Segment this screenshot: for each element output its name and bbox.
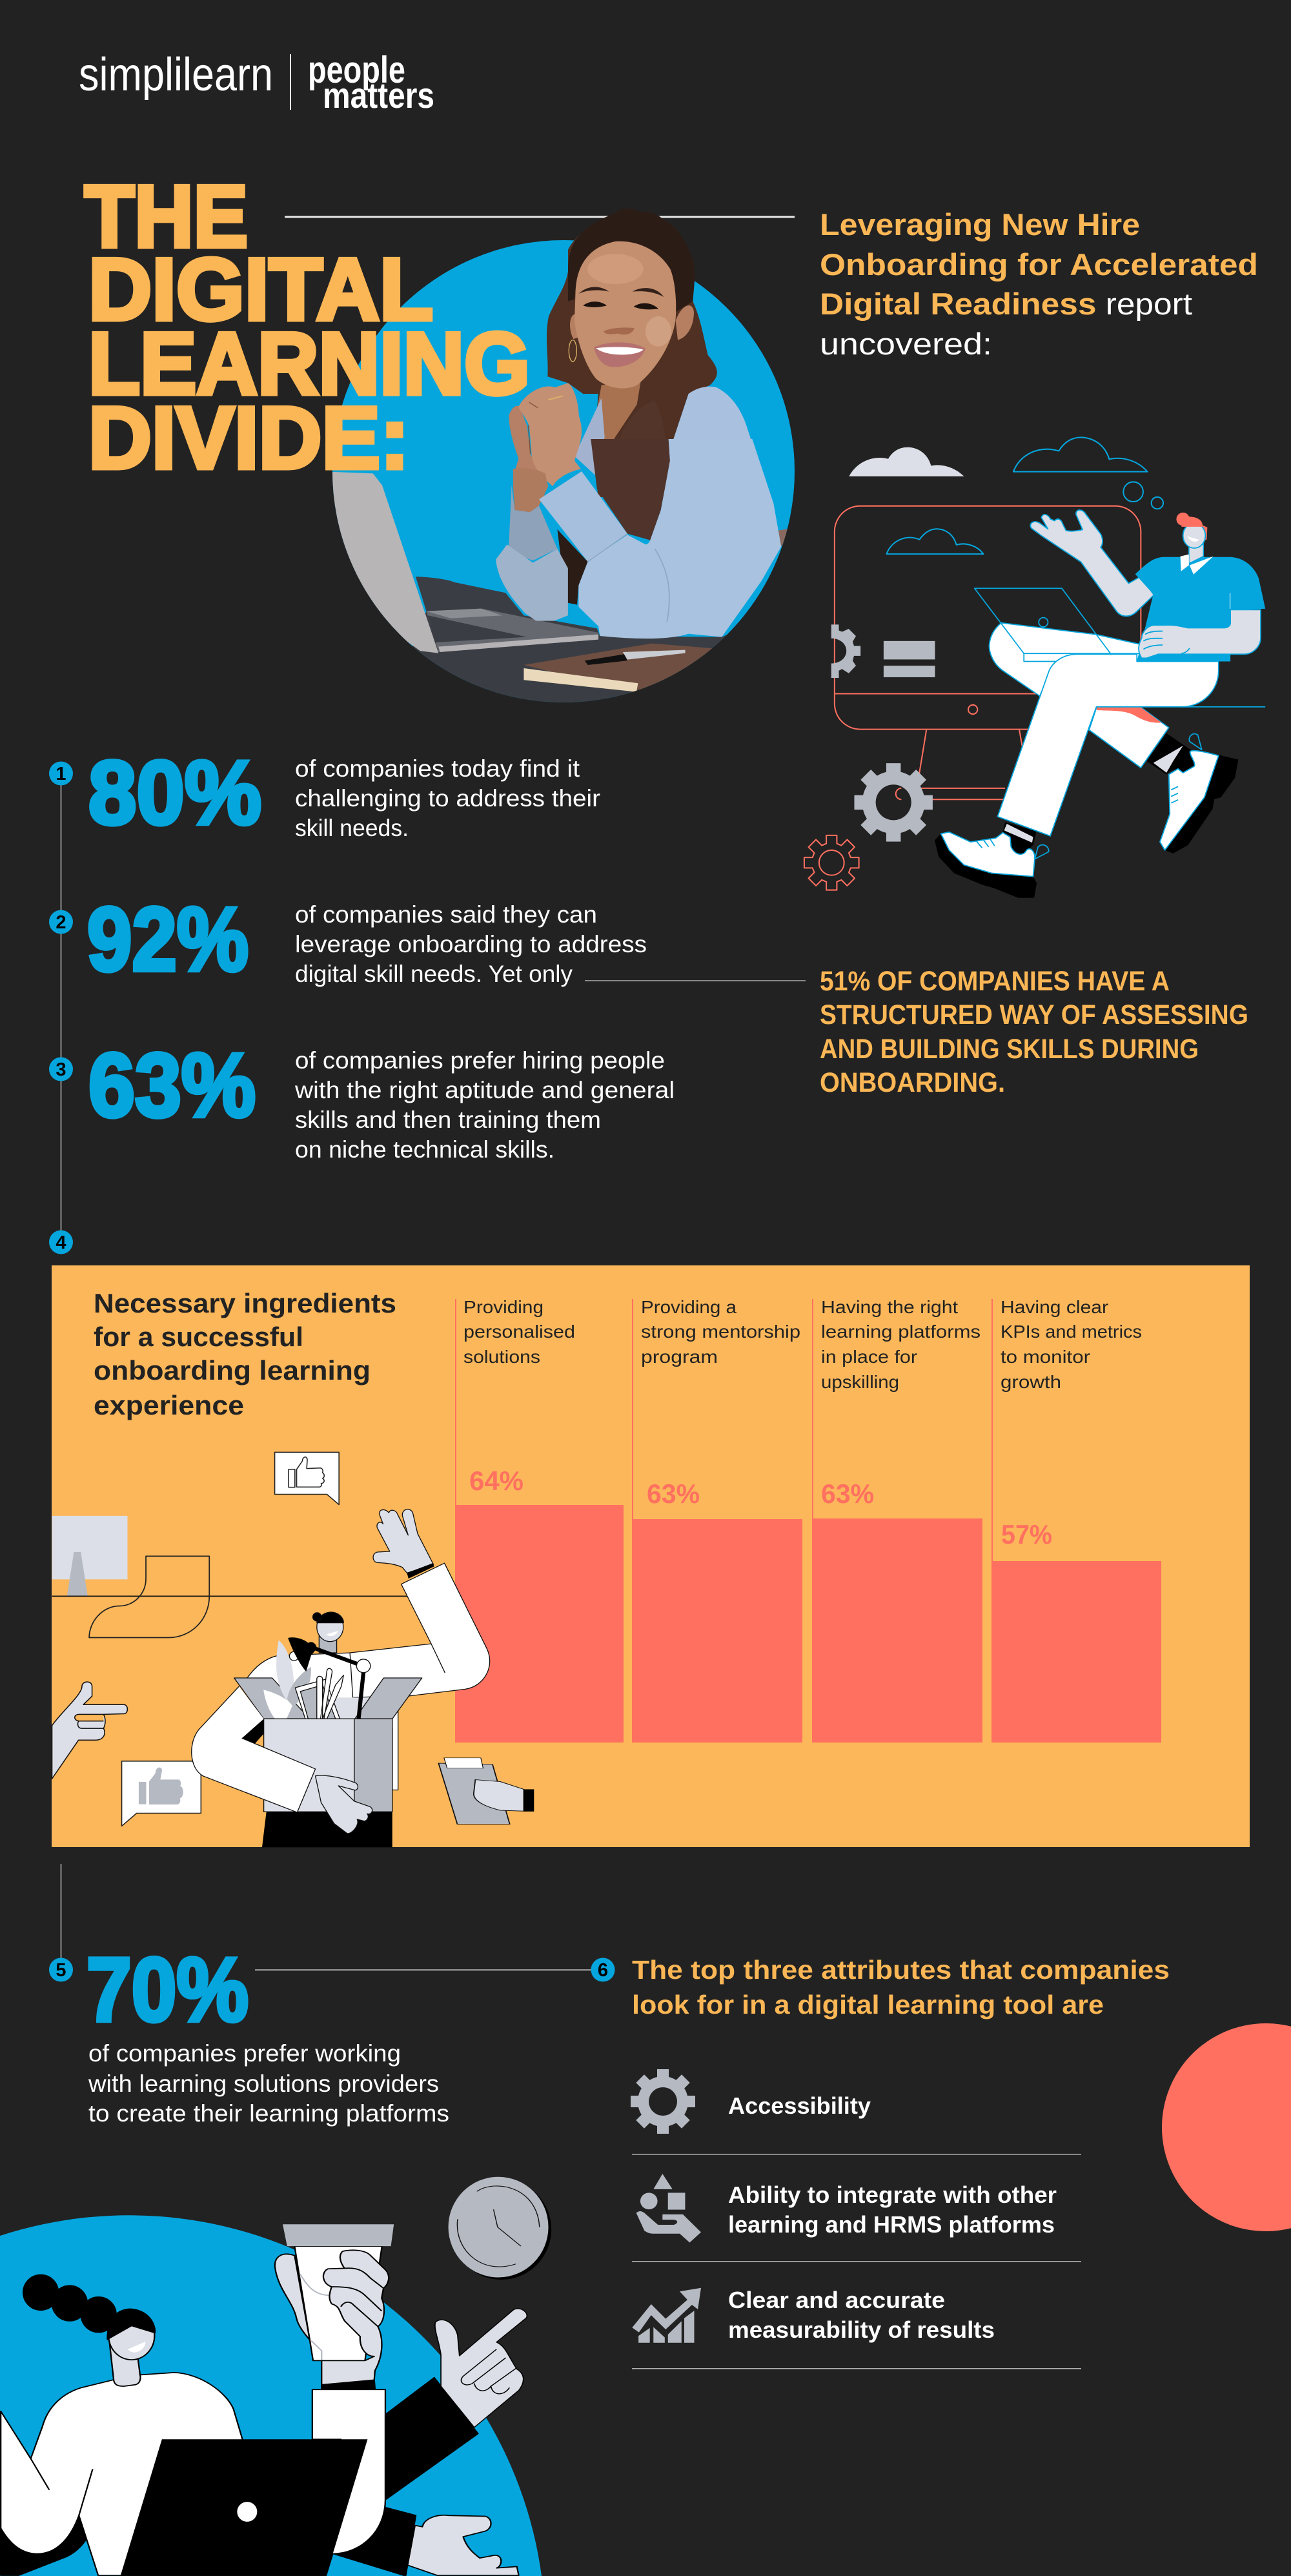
woman blouse and sleeves	[496, 439, 781, 639]
icon: clock	[449, 2177, 551, 2280]
bar: learning platforms: 63%	[821, 1478, 874, 1509]
raised hand	[373, 1509, 434, 1579]
heading: for a successful	[94, 1322, 303, 1352]
pointing hand	[434, 2309, 527, 2428]
connector line between 5 and 6	[255, 1969, 592, 1970]
illustration: man with laptop sitting in front of monitor	[804, 437, 1265, 898]
sleeve and lower hand	[192, 1686, 372, 1834]
body	[234, 1563, 490, 1790]
stat: 92%: leverage onboarding to address	[295, 931, 647, 957]
bar: KPIs and metrics: 57%	[1001, 1519, 1052, 1549]
bar: mentorship program: strong mentorship	[641, 1322, 800, 1342]
icon: half gear	[831, 624, 860, 678]
stat: 70%: to create their learning platforms	[88, 2100, 449, 2127]
stat: 92%: 92%	[87, 888, 249, 990]
stat: 63%: skills and then training them	[295, 1107, 601, 1133]
bar: KPIs and metrics: KPIs and metrics	[1001, 1322, 1142, 1342]
bar: KPIs and metrics: growth	[1001, 1372, 1061, 1392]
stat: 80%: of companies today find it	[295, 755, 580, 782]
attribute: measurability	[632, 2287, 995, 2343]
title: LEARNING	[88, 314, 530, 413]
bar chart	[455, 1297, 1161, 1743]
step 2 badge	[49, 910, 73, 934]
attribute: accessibility: Accessibility	[728, 2092, 871, 2119]
timeline	[49, 762, 73, 1254]
head	[1176, 513, 1207, 548]
step 2 badge: 2	[56, 912, 66, 933]
box	[242, 1678, 422, 1812]
report intro text: Onboarding for Accelerated	[820, 247, 1258, 281]
raised arm with cup	[275, 2224, 478, 2575]
title: DIGITAL	[88, 240, 433, 338]
bar: learning platforms: in place for	[821, 1347, 917, 1367]
step 6 badge	[591, 1958, 615, 1982]
icon: pointing hand	[52, 1682, 127, 1779]
heading: top three attributes: look for in a digital learning tool are	[632, 1990, 1104, 2019]
attribute: measurability: measurability of results	[728, 2316, 995, 2343]
title rule	[285, 216, 795, 218]
callout: 51%: 51% OF COMPANIES HAVE A	[820, 966, 1170, 997]
bar: KPIs and metrics: Having clear	[1001, 1297, 1108, 1317]
stat: 63%: 63%	[88, 1034, 256, 1136]
bar: personalised solutions	[455, 1297, 624, 1743]
connector to 51%	[585, 980, 806, 981]
arm raised	[1030, 510, 1154, 616]
heading: experience	[94, 1390, 244, 1420]
step 4 badge	[49, 1231, 73, 1254]
icon: hand with shapes	[636, 2174, 701, 2243]
front leg	[935, 654, 1265, 898]
attribute: integration: learning and HRMS platforms	[728, 2211, 1055, 2238]
stat: 63%: with the right aptitude and general	[294, 1077, 675, 1103]
attribute: integration	[636, 2174, 1057, 2243]
bar: learning platforms: upskilling	[821, 1372, 899, 1392]
bar: learning platforms	[812, 1297, 982, 1743]
stat: 63%: of companies prefer hiring people	[295, 1047, 665, 1074]
laptop	[975, 588, 1142, 661]
logo: simplilearn and people matters	[79, 49, 434, 116]
heading: top three attributes: The top three attributes that companies	[632, 1955, 1170, 1985]
plant, frame and pencils in the box	[263, 1640, 343, 1719]
step 5 badge: 5	[56, 1960, 66, 1981]
stat: 92%	[87, 888, 647, 990]
callout: 51%: AND BUILDING SKILLS DURING	[820, 1034, 1199, 1065]
bar: personalised solutions: solutions	[463, 1347, 540, 1367]
bar: personalised solutions: Providing	[463, 1297, 544, 1317]
step 1 badge	[49, 762, 73, 785]
attribute: measurability: Clear and accurate	[728, 2287, 945, 2313]
icon: gear	[631, 2069, 695, 2134]
icon: monitor	[835, 506, 1141, 799]
bar: learning platforms: learning platforms	[821, 1322, 981, 1342]
stat: 70%	[86, 1939, 449, 2127]
report intro text: Leveraging New Hire	[820, 207, 1140, 241]
stat: 70%: with learning solutions providers	[88, 2070, 439, 2097]
icon: outline gear	[804, 835, 859, 890]
panel: ingredients	[52, 1265, 1250, 1847]
illustration: employee carrying box	[52, 1452, 490, 1847]
stat: 92%: of companies said they can	[295, 901, 597, 928]
bar: KPIs and metrics: to monitor	[1001, 1347, 1090, 1367]
icon: large gear	[854, 763, 933, 842]
step 4 badge: 4	[56, 1232, 66, 1253]
illustration: team with laptop, cup and clock	[0, 2177, 551, 2576]
photo: smiling woman at laptop in blue circle	[317, 209, 795, 719]
laptop	[121, 2439, 367, 2576]
logo: simplilearn and people matters: simplilearn	[79, 49, 273, 101]
logo: simplilearn and people matters: people	[308, 49, 405, 91]
report intro text: uncovered:	[820, 327, 992, 361]
bar: personalised solutions: personalised	[463, 1322, 575, 1342]
title: THE	[85, 167, 248, 265]
stat: 63%: on niche technical skills.	[295, 1136, 554, 1163]
step 3 badge: 3	[56, 1059, 66, 1080]
stat: 80%: 80%	[88, 742, 261, 843]
bar: mentorship program: Providing a	[641, 1297, 737, 1317]
bar: learning platforms: Having the right	[821, 1297, 958, 1317]
stat: 80%: challenging to address their	[295, 785, 600, 812]
trousers	[262, 1812, 392, 1847]
icon: grey thumbs-up bubble	[122, 1761, 201, 1826]
lower hand	[407, 2515, 519, 2575]
callout: 51%: STRUCTURED WAY OF ASSESSING	[820, 999, 1248, 1030]
heading	[94, 1288, 396, 1420]
attribute: integration: Ability to integrate with other	[728, 2182, 1057, 2208]
icon: rising chart	[632, 2288, 701, 2343]
step 1 badge: 1	[56, 764, 66, 784]
icon: clipboard and hand	[438, 1758, 534, 1824]
bar: mentorship program: program	[641, 1347, 718, 1367]
report intro text: Digital Readiness report	[820, 287, 1192, 321]
bar: mentorship program: 63%	[647, 1478, 700, 1509]
stat: 63%	[88, 1034, 675, 1163]
back leg	[990, 623, 1238, 854]
callout: 51%	[820, 966, 1248, 1098]
icon: thumbs-up bubble	[275, 1452, 339, 1505]
woman head, hair and hands	[509, 209, 767, 497]
heading: top three attributes	[632, 1955, 1170, 2019]
stat: 70%: 70%	[86, 1939, 249, 2040]
attribute: accessibility	[631, 2069, 871, 2134]
woman torso	[1, 2275, 367, 2575]
bar: personalised solutions: 64%	[469, 1466, 524, 1496]
step 3 badge	[49, 1058, 73, 1081]
bar: KPIs and metrics	[991, 1297, 1161, 1743]
connector line to 70%	[61, 1864, 62, 1958]
icon: clouds	[849, 437, 1163, 554]
heading: onboarding learning	[94, 1355, 371, 1385]
report intro text	[820, 207, 1258, 361]
title: DIVIDE:	[88, 389, 409, 487]
desk lamp	[288, 1637, 371, 1719]
stat: 92%: digital skill needs. Yet only	[295, 961, 573, 987]
stat: 80%: skill needs.	[295, 815, 409, 841]
stat: 70%: of companies prefer working	[88, 2040, 401, 2067]
step 6 badge: 6	[598, 1960, 608, 1981]
heading: Necessary ingredients	[94, 1288, 396, 1318]
stat: 80%	[88, 742, 600, 843]
callout: 51%: ONBOARDING.	[820, 1067, 1005, 1098]
step 5 badge	[49, 1958, 73, 1982]
title	[85, 167, 530, 487]
head	[313, 1612, 343, 1653]
logo: simplilearn and people matters: matters	[323, 75, 434, 116]
bar: mentorship program	[632, 1297, 802, 1743]
forearm	[1139, 609, 1261, 658]
shirt	[1135, 557, 1265, 661]
decorative coral circle	[1162, 2023, 1291, 2231]
